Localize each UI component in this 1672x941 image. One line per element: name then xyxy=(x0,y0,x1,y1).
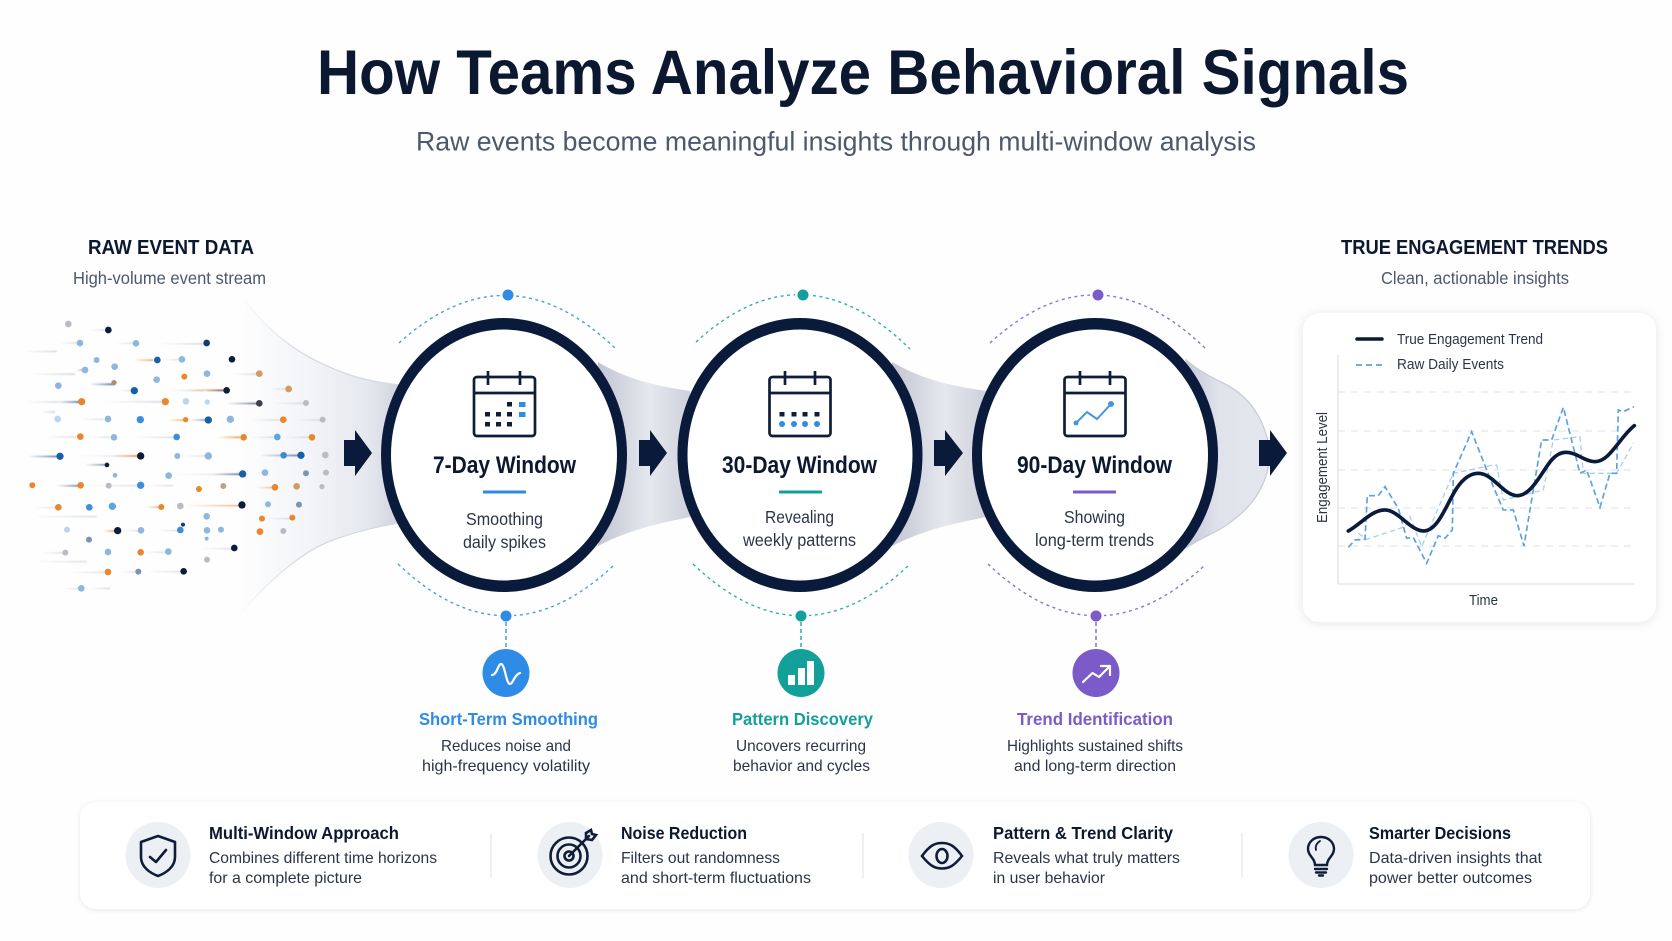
item: smarter decisions: power better outcomes xyxy=(1369,870,1532,887)
icon: shield xyxy=(141,836,175,876)
panel: 90-day window: Showing xyxy=(1064,507,1125,527)
column: pattern discovery: Uncovers recurring xyxy=(736,738,866,755)
icon: wave xyxy=(482,649,530,697)
heading: raw event data: High-volume event stream xyxy=(73,268,266,288)
heading: raw event data xyxy=(73,236,266,288)
heading: true engagement trends: Clean, actionable insights xyxy=(1381,268,1569,288)
item: noise reduction: Noise Reduction xyxy=(621,823,747,843)
raw event stream dots xyxy=(25,321,329,592)
column: short-term smoothing: Short-Term Smoothing xyxy=(419,709,598,729)
panel: 30-day window: weekly patterns xyxy=(742,530,856,550)
item: pattern and trend clarity xyxy=(908,822,1180,888)
icon: eye xyxy=(922,843,962,868)
column: trend identification: and long-term direction xyxy=(1014,758,1176,775)
column: trend identification: Highlights sustained shifts xyxy=(1007,738,1183,755)
chart lines xyxy=(1348,407,1634,563)
item: noise reduction xyxy=(538,822,811,888)
chart legend xyxy=(1356,331,1543,373)
icon: target xyxy=(550,830,596,874)
subtitle: Raw events become meaningful insights through multi-window analysis xyxy=(416,126,1256,156)
arrow 2 xyxy=(639,430,667,476)
chart legend: True Engagement Trend xyxy=(1397,331,1543,348)
item: noise reduction: Filters out randomness xyxy=(621,850,780,867)
column: short-term smoothing: high-frequency volatility xyxy=(422,758,590,775)
icon: trend arrow xyxy=(1072,649,1120,697)
panel: 90-day window: 90-Day Window xyxy=(1017,452,1172,479)
item: smarter decisions: Smarter Decisions xyxy=(1369,823,1511,843)
panel: 30-day window xyxy=(678,287,922,624)
arrow 1 xyxy=(344,430,372,476)
item: pattern and trend clarity: Pattern & Trend Clarity xyxy=(993,823,1173,843)
funnel ribbon xyxy=(237,300,1270,617)
panel: 90-day window xyxy=(972,287,1218,624)
heading: true engagement trends xyxy=(1341,236,1608,288)
column: trend identification: Trend Identification xyxy=(1017,709,1173,729)
panel: 7-day window: daily spikes xyxy=(463,532,546,552)
icon: bars xyxy=(778,649,824,697)
item: pattern and trend clarity: Reveals what truly matters xyxy=(993,850,1180,867)
panel: 7-day window: Smoothing xyxy=(466,509,543,529)
item: smarter decisions: Data-driven insights that xyxy=(1369,850,1543,867)
y axis label: Engagement Level xyxy=(1315,412,1331,523)
panel: summary bar xyxy=(80,802,1590,909)
arrow 3 xyxy=(934,430,963,476)
item: multi-window approach: Combines different time horizons xyxy=(209,850,437,867)
item: pattern and trend clarity: in user behavior xyxy=(993,870,1106,887)
column: pattern discovery xyxy=(732,622,873,775)
item: smarter decisions xyxy=(1288,822,1543,888)
column: pattern discovery: Pattern Discovery xyxy=(732,709,873,729)
icon: light bulb xyxy=(1308,837,1334,876)
panel: 7-day window: 7-Day Window xyxy=(433,452,576,479)
panel: line chart card xyxy=(1303,313,1656,622)
item: multi-window approach: for a complete picture xyxy=(209,870,362,887)
column: short-term smoothing xyxy=(419,622,598,775)
panel: 30-day window: 30-Day Window xyxy=(722,452,877,479)
item: noise reduction: and short-term fluctuations xyxy=(621,870,811,887)
heading: true engagement trends: TRUE ENGAGEMENT TRENDS xyxy=(1341,236,1608,259)
panel: 90-day window: long-term trends xyxy=(1035,530,1154,550)
column: trend identification xyxy=(1007,622,1183,775)
title: How Teams Analyze Behavioral Signals xyxy=(317,38,1409,108)
column: pattern discovery: behavior and cycles xyxy=(733,758,870,775)
chart legend: Raw Daily Events xyxy=(1397,356,1504,373)
item: multi-window approach: Multi-Window Approach xyxy=(209,823,399,843)
item: multi-window approach xyxy=(126,822,437,888)
panel: 7-day window xyxy=(381,287,627,624)
arrow 4 xyxy=(1259,430,1287,476)
x axis label: Time xyxy=(1469,593,1498,609)
heading: raw event data: RAW EVENT DATA xyxy=(88,236,254,259)
column: short-term smoothing: Reduces noise and xyxy=(441,738,571,755)
panel: 30-day window: Revealing xyxy=(765,507,834,527)
